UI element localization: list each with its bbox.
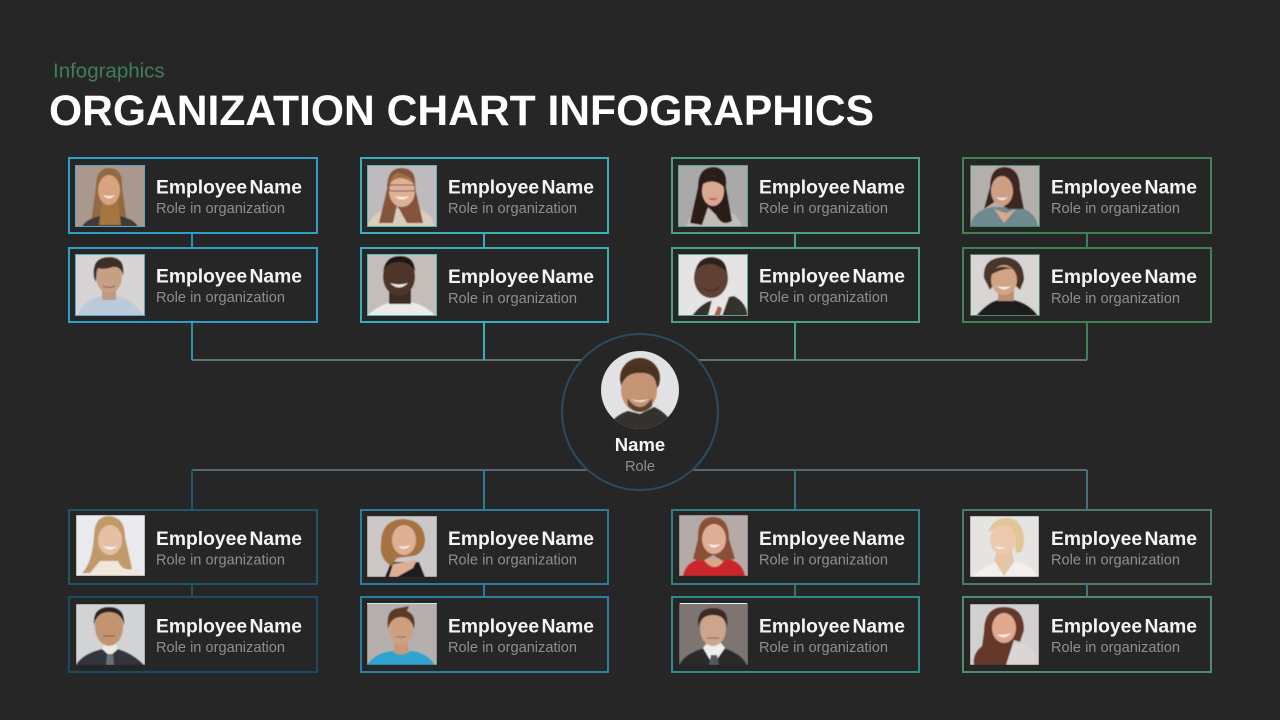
role: Role in organization [1051, 640, 1180, 656]
portrait 3 [367, 165, 437, 227]
employee card 1 [69, 158, 317, 247]
portrait 6 [678, 254, 748, 316]
employee card 9 [69, 510, 317, 584]
leader name: Name [615, 434, 665, 455]
name: Employee Name [759, 178, 905, 198]
portrait 7 [970, 165, 1040, 227]
employee card 11 [361, 510, 608, 584]
employee card 3 [361, 158, 608, 233]
portrait 8 [970, 254, 1040, 316]
name: Employee Name [759, 616, 905, 638]
employee card 15 [963, 510, 1211, 584]
name: Employee Name [1051, 267, 1197, 288]
role: Role in organization [759, 290, 888, 306]
portrait 9 [76, 515, 145, 576]
employee card 16 [963, 597, 1211, 672]
outer ring [562, 334, 718, 490]
employee card 13 [672, 510, 919, 584]
role: Role in organization [1051, 291, 1180, 307]
role: Role in organization [448, 640, 577, 656]
leader role: Role [625, 459, 655, 475]
name: Employee Name [448, 267, 594, 288]
portrait: leader [600, 350, 680, 432]
role: Role in organization [156, 640, 285, 656]
employee card 8 [963, 248, 1211, 322]
portrait 2 [75, 254, 145, 316]
employee card 14 [672, 597, 919, 672]
portrait 4 [367, 254, 437, 316]
name: Employee Name [759, 529, 905, 550]
role: Role in organization [759, 552, 888, 568]
employee card 4 [361, 248, 608, 322]
employee card 5 [672, 158, 919, 233]
connector lines: top branch [192, 233, 1087, 360]
portrait 15 [970, 516, 1039, 577]
name: Employee Name [448, 178, 594, 198]
name: Employee Name [448, 529, 594, 550]
role: Role in organization [448, 291, 577, 307]
portrait 11 [367, 516, 437, 577]
central node: leader [562, 334, 718, 490]
name: Employee Name [1051, 178, 1197, 198]
role: Role in organization [1051, 201, 1180, 217]
name: Employee Name [156, 266, 302, 288]
name: Employee Name [1051, 529, 1197, 550]
name: Employee Name [156, 529, 302, 550]
subtitle: Infographics [53, 60, 165, 82]
name: Employee Name [759, 266, 905, 288]
role: Role in organization [156, 201, 285, 217]
role: Role in organization [448, 201, 577, 217]
portrait 1 [75, 165, 145, 227]
name: Employee Name [1051, 616, 1197, 638]
employee card 10 [69, 597, 317, 672]
role: Role in organization [759, 201, 888, 217]
role: Role in organization [448, 552, 577, 568]
role: Role in organization [156, 552, 285, 568]
name: Employee Name [448, 616, 594, 638]
portrait 12 [367, 603, 437, 665]
connector lines: bottom branch [192, 470, 1087, 597]
name: Employee Name [156, 178, 302, 198]
portrait 16 [970, 604, 1039, 665]
name: Employee Name [156, 616, 302, 638]
portrait 13 [679, 515, 748, 576]
role: Role in organization [759, 640, 888, 656]
employee card 2 [69, 248, 317, 322]
portrait 5 [678, 165, 748, 227]
portrait 14 [679, 603, 748, 665]
employee card 12 [361, 597, 608, 672]
role: Role in organization [1051, 552, 1180, 568]
portrait 10 [76, 604, 145, 665]
employee card 6 [672, 248, 919, 322]
employee card 7 [963, 158, 1211, 233]
role: Role in organization [156, 290, 285, 306]
title: ORGANIZATION CHART INFOGRAPHICS [49, 87, 874, 135]
